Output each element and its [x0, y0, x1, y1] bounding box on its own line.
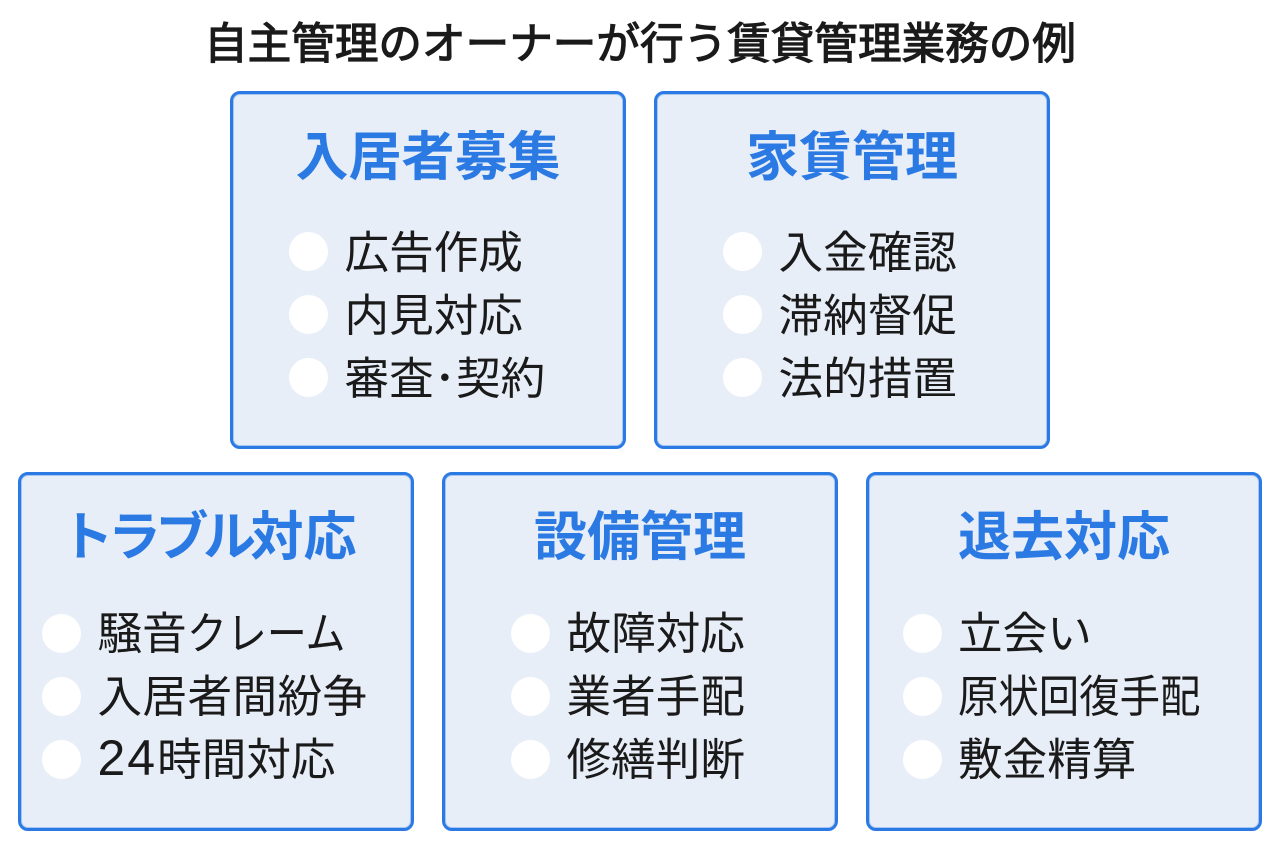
heading: 入居者募集: 入居者募集: [296, 128, 560, 187]
heading: 設備管理: 設備管理: [534, 508, 746, 567]
list item: 入金確認: [723, 229, 957, 278]
title: 自主管理のオーナーが行う賃貸管理業務の例: [204, 21, 1076, 69]
panel: トラブル対応: 入居者間紛争: [98, 673, 367, 722]
list item: 原状回復手配: [903, 673, 1200, 722]
panel: トラブル対応: クレーム: [187, 610, 345, 659]
panel: 入居者募集: 内見対応: [344, 292, 523, 341]
panel: 入居者募集: [230, 91, 626, 449]
panel: トラブル対応: 騒音: [98, 610, 187, 659]
heading: トラブル対応: トラブル対応: [60, 508, 356, 567]
heading: 家賃管理: 家賃管理: [746, 128, 958, 187]
panel: 退去対応: 立会い: [958, 610, 1092, 659]
panel: 設備管理: 修繕判断: [566, 736, 745, 785]
list item: 法的措置: [723, 355, 957, 404]
panel: 退去対応: 敷金精算: [958, 736, 1136, 785]
list item: 広告作成: [289, 229, 523, 278]
list item: 騒音クレーム: [42, 610, 345, 659]
panel: 設備管理: 故障対応: [566, 610, 745, 659]
list item: 24時間対応: [42, 730, 336, 786]
panel: 入居者募集: 審査･契約: [344, 355, 545, 404]
list item: 故障対応: [511, 610, 745, 659]
list item: 立会い: [903, 610, 1092, 659]
panel: トラブル対応: [18, 472, 414, 831]
list item: 審査・契約: [289, 355, 545, 404]
panel: 入居者募集: 広告作成: [344, 229, 523, 278]
list item: 入居者間紛争: [42, 673, 367, 722]
panel: 退去対応: 原状回復手配: [958, 673, 1200, 722]
heading: 退去対応: 退去対応: [958, 508, 1170, 567]
panel: 家賃管理: 法的措置: [778, 355, 957, 404]
panel: 家賃管理: [654, 91, 1050, 449]
panel: 退去対応: [866, 472, 1262, 831]
list item: 敷金精算: [903, 736, 1136, 785]
list item: 滞納督促: [723, 292, 957, 341]
panel: 家賃管理: 滞納督促: [778, 292, 957, 341]
list item: 内見対応: [289, 292, 523, 341]
list item: 修繕判断: [511, 736, 745, 785]
panel: トラブル対応: 24時間対応: [98, 730, 336, 786]
panel: 家賃管理: 入金確認: [778, 229, 957, 278]
panel: 設備管理: 業者手配: [566, 673, 745, 722]
list item: 業者手配: [511, 673, 745, 722]
panel: 設備管理: [442, 472, 838, 831]
